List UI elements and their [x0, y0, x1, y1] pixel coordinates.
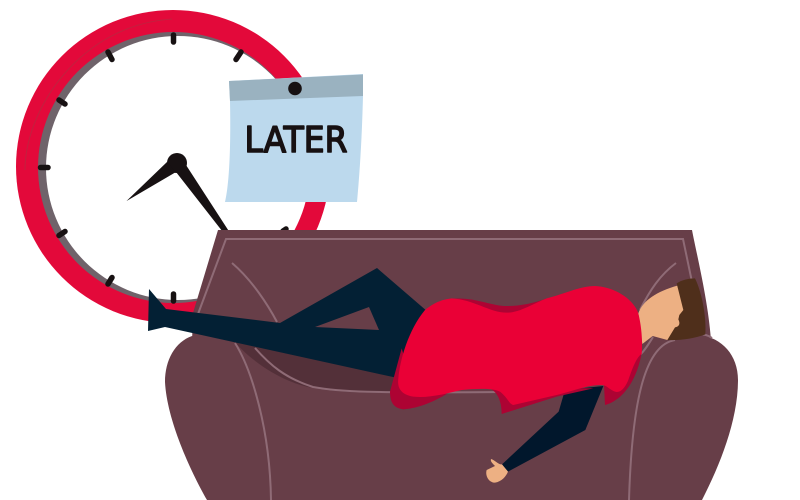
sweater shadow — [390, 298, 642, 414]
calendar note: LATER: LATER — [244, 120, 348, 161]
sweater — [398, 286, 642, 405]
sofa back — [190, 230, 711, 400]
neck and face — [638, 286, 685, 344]
calendar note: LATER — [225, 74, 363, 202]
clock hands — [126, 153, 232, 236]
arm and hand — [390, 278, 706, 483]
seat and cushion lines — [232, 263, 676, 392]
person lying on the sofa — [148, 268, 706, 483]
sofa base — [165, 335, 738, 500]
sofa seat shadow — [233, 340, 420, 393]
hair — [667, 278, 706, 340]
legs and shoe — [148, 268, 428, 380]
clock tick marks — [40, 35, 286, 301]
sofa — [165, 230, 738, 500]
armrest seams — [235, 334, 712, 500]
wall clock — [16, 10, 330, 323]
